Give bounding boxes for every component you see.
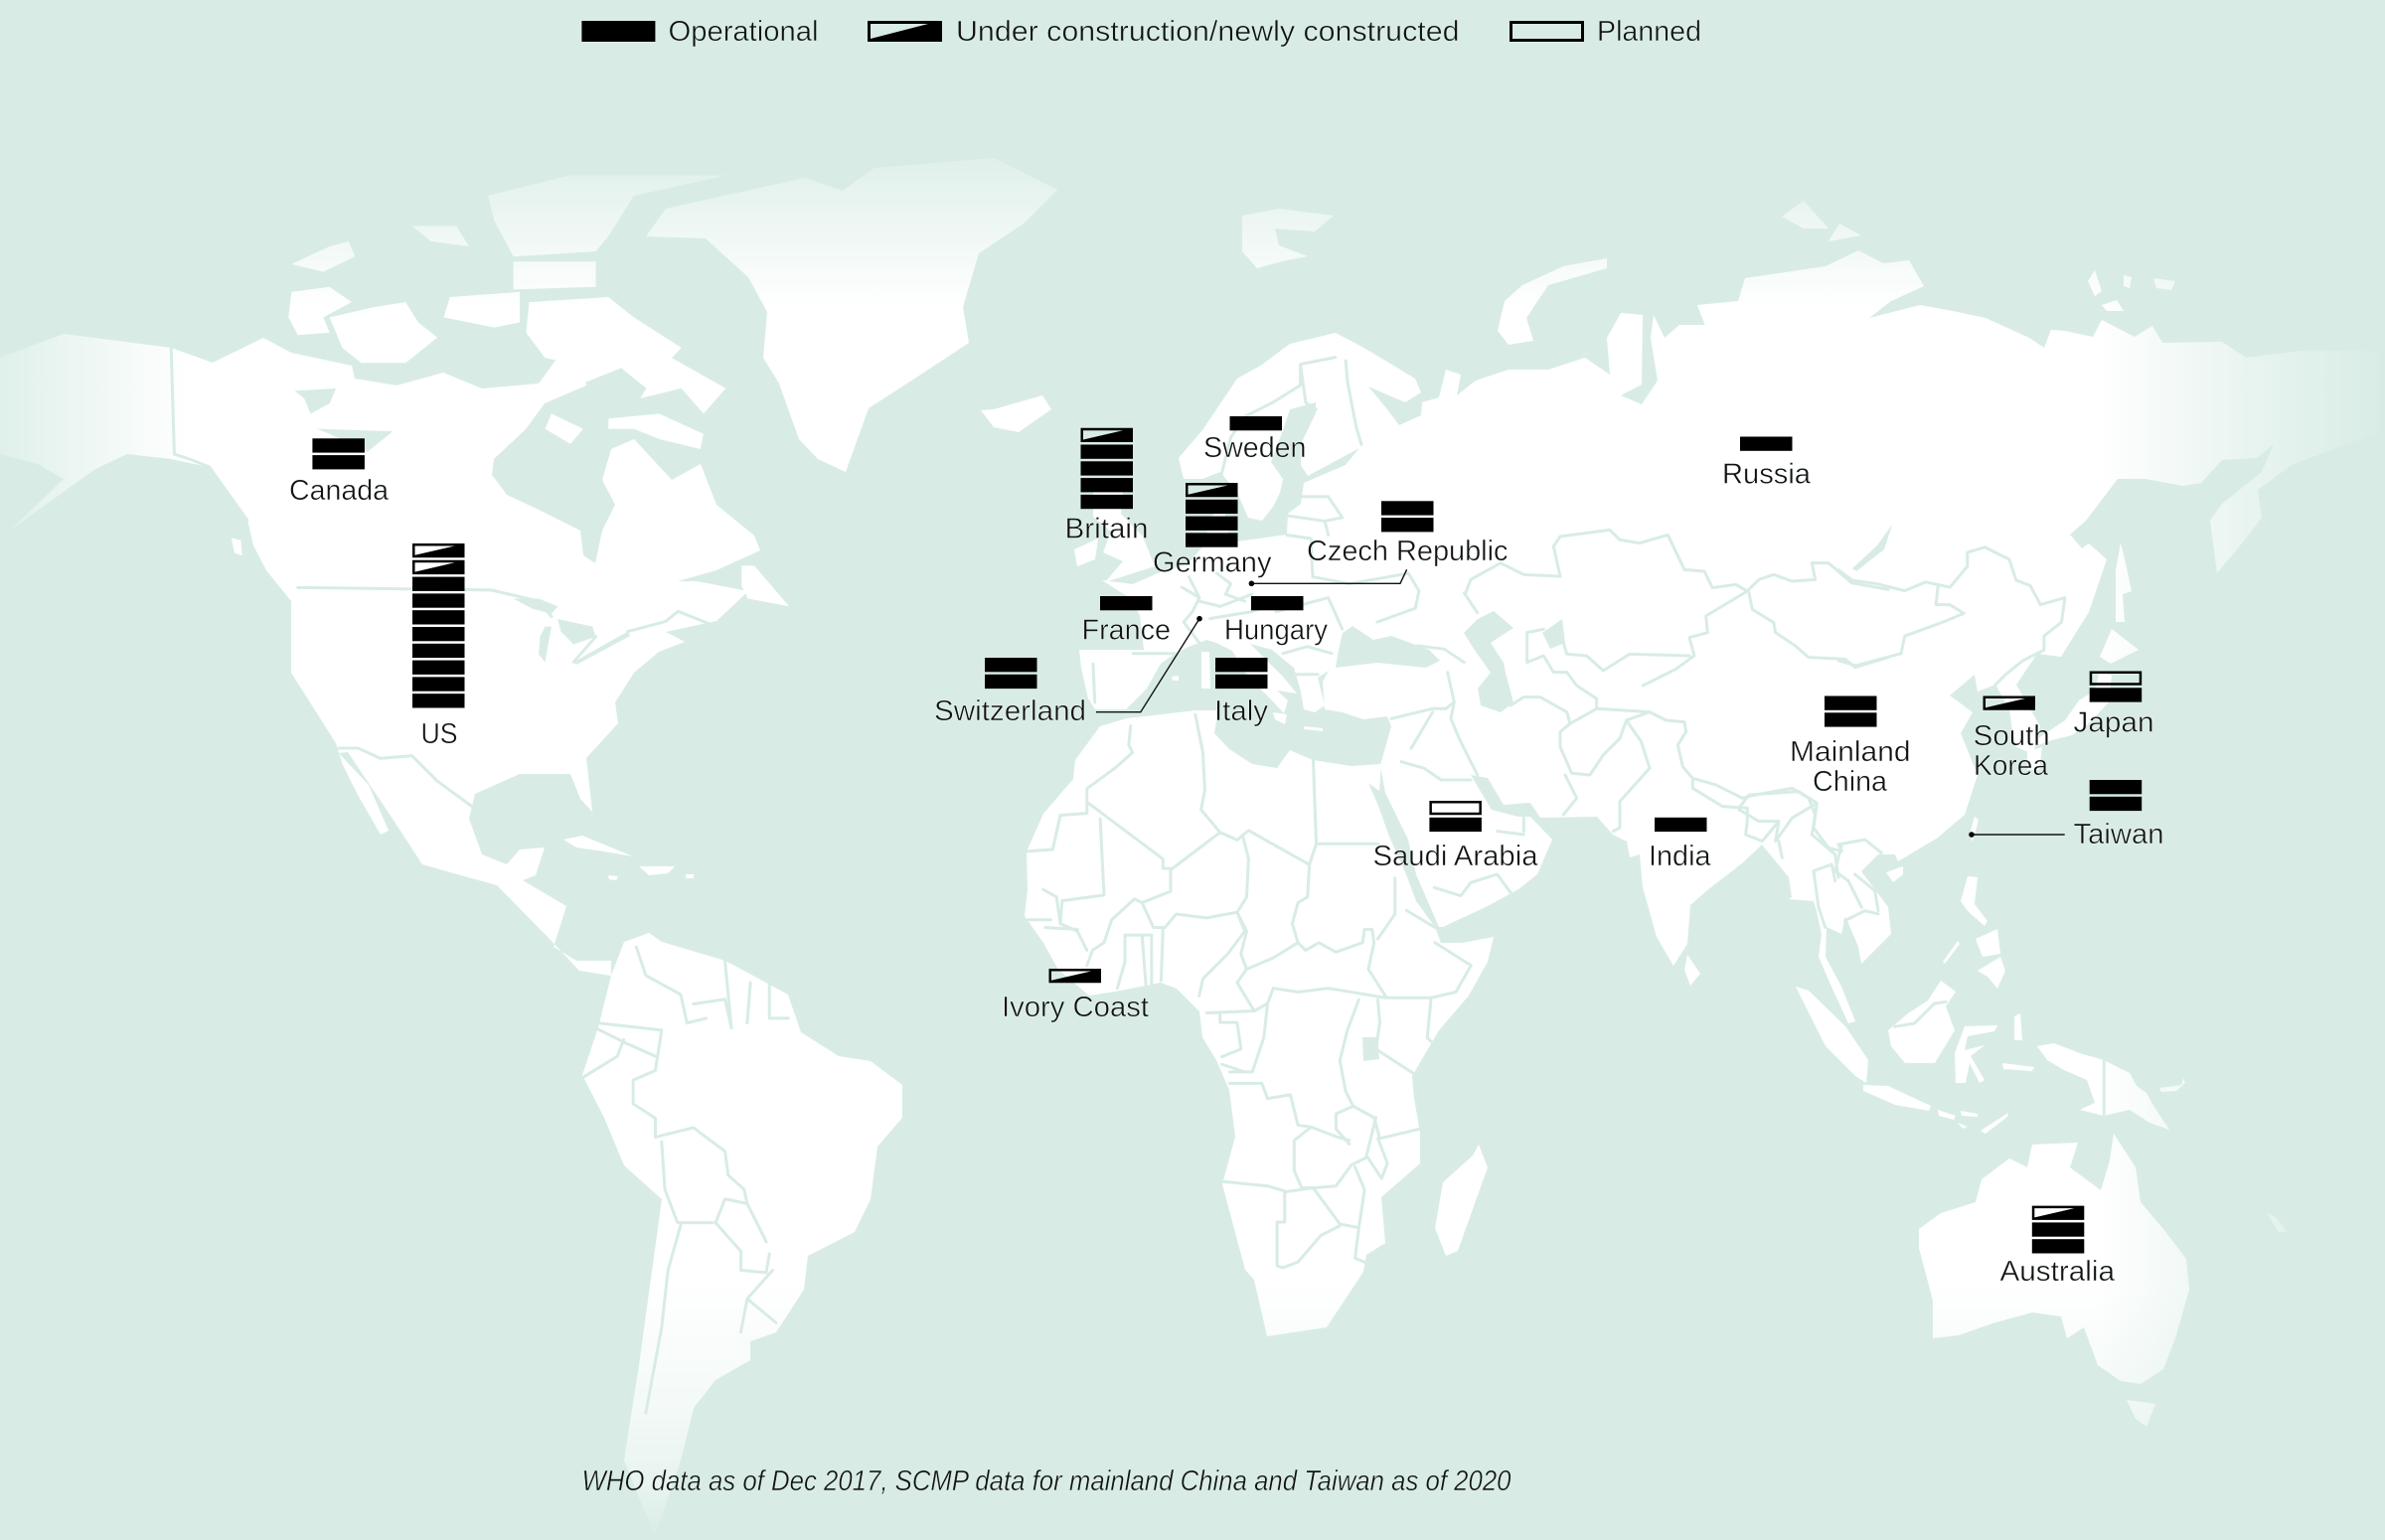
land: South America bbox=[582, 933, 902, 1536]
legend item: under construction: Under construction/newly constructed bbox=[956, 16, 1459, 48]
land: Southeast Asia islands bbox=[1684, 866, 2185, 1134]
land: Greenland bbox=[646, 158, 1057, 472]
land: Japan and Sakhalin bbox=[2027, 542, 2139, 770]
marker: Italy: Italy bbox=[1214, 695, 1269, 727]
water: Aral Sea bbox=[1542, 619, 1565, 649]
land: Eurasia bbox=[1079, 250, 2385, 1023]
land: Africa bbox=[1025, 710, 1494, 1336]
marker: Ivory Coast bbox=[1002, 969, 1149, 1023]
legend bbox=[581, 16, 1701, 48]
marker: Saudi Arabia: Saudi Arabia bbox=[1373, 841, 1538, 872]
marker: India: India bbox=[1649, 841, 1711, 872]
water: Lake Victoria bbox=[1362, 1037, 1379, 1061]
borders: Africa bbox=[1027, 714, 1471, 1268]
borders: Southeast Asia bbox=[1739, 792, 2104, 1115]
marker: Britain: Britain bbox=[1065, 514, 1149, 545]
borders: Central Asia and Middle East bbox=[1391, 530, 1888, 896]
leader line: Taiwan bbox=[1969, 832, 2065, 838]
marker: Czech Republic bbox=[1307, 501, 1509, 567]
marker: US: US bbox=[421, 718, 457, 750]
country borders bbox=[171, 348, 2104, 1413]
borders: North America bbox=[171, 348, 716, 807]
marker: India bbox=[1649, 818, 1711, 872]
land: Arctic Canada islands bbox=[232, 176, 789, 606]
marker: Russia bbox=[1722, 437, 1812, 491]
marker: Sweden bbox=[1203, 416, 1306, 464]
marker: Russia: Russia bbox=[1722, 459, 1812, 491]
marker: Taiwan: Taiwan bbox=[2073, 819, 2164, 850]
marker: South Korea: South bbox=[1974, 720, 2050, 752]
water: Caspian Sea bbox=[1464, 611, 1513, 712]
marker: Canada: Canada bbox=[289, 475, 390, 507]
land: Mediterranean islands bbox=[1172, 652, 1323, 731]
leader line: Czech Republic bbox=[1249, 569, 1407, 586]
marker: Australia: Australia bbox=[1999, 1256, 2116, 1288]
marker: US bbox=[412, 543, 465, 750]
land: Arctic Russia islands bbox=[1242, 201, 2175, 345]
marker: Taiwan bbox=[2073, 780, 2164, 850]
land: Taiwan bbox=[1970, 817, 1979, 842]
water: North American lakes bbox=[295, 388, 631, 665]
marker: South Korea: Korea bbox=[1974, 750, 2049, 782]
marker: Hungary: Hungary bbox=[1224, 614, 1328, 646]
legend item: planned: Planned bbox=[1597, 16, 1701, 48]
marker: Italy bbox=[1214, 658, 1269, 727]
marker: Hungary bbox=[1224, 596, 1328, 646]
marker: Czech Republic: Czech Republic bbox=[1307, 536, 1509, 567]
marker: Germany: Germany bbox=[1153, 547, 1272, 579]
water: Black Sea bbox=[1336, 626, 1440, 668]
marker: France bbox=[1081, 596, 1171, 646]
legend item: operational bbox=[581, 16, 819, 48]
marker: Mainland China: Mainland bbox=[1790, 736, 1910, 768]
marker: Switzerland bbox=[934, 658, 1086, 727]
legend item: operational: Operational bbox=[668, 16, 819, 48]
marker: France: France bbox=[1081, 614, 1171, 646]
legend item: planned bbox=[1510, 16, 1701, 48]
marker: Japan bbox=[2073, 672, 2154, 739]
marker: Sweden: Sweden bbox=[1203, 432, 1306, 464]
marker: Japan: Japan bbox=[2073, 707, 2154, 739]
borders: East Asia bbox=[1838, 547, 2065, 685]
marker: Canada bbox=[289, 438, 390, 507]
borders: South America bbox=[582, 947, 788, 1413]
marker: Mainland China bbox=[1790, 695, 1910, 798]
marker: Saudi Arabia bbox=[1373, 801, 1538, 872]
land: north Atlantic islands bbox=[981, 395, 1155, 582]
borders: Europe bbox=[1093, 358, 1419, 702]
marker: Australia bbox=[1999, 1206, 2116, 1288]
marker: Britain bbox=[1065, 428, 1149, 545]
land: Madagascar bbox=[1435, 1145, 1488, 1256]
land: North America bbox=[0, 334, 760, 976]
water: Lake Baikal bbox=[1852, 525, 1892, 571]
marker: Switzerland: Switzerland bbox=[934, 695, 1086, 727]
marker: Mainland China: China bbox=[1813, 766, 1888, 798]
marker: Ivory Coast: Ivory Coast bbox=[1002, 992, 1149, 1023]
source note: WHO data as of Dec 2017, SCMP data for mainland China and Taiwan as of 2020 bbox=[582, 1465, 1510, 1497]
marker: Germany bbox=[1153, 483, 1272, 579]
land: Australia bbox=[1919, 1134, 2287, 1427]
land: Caribbean islands bbox=[563, 836, 694, 880]
leader line: Switzerland bbox=[1096, 616, 1202, 712]
inland water bbox=[295, 388, 1892, 1061]
marker: South Korea bbox=[1974, 695, 2050, 782]
